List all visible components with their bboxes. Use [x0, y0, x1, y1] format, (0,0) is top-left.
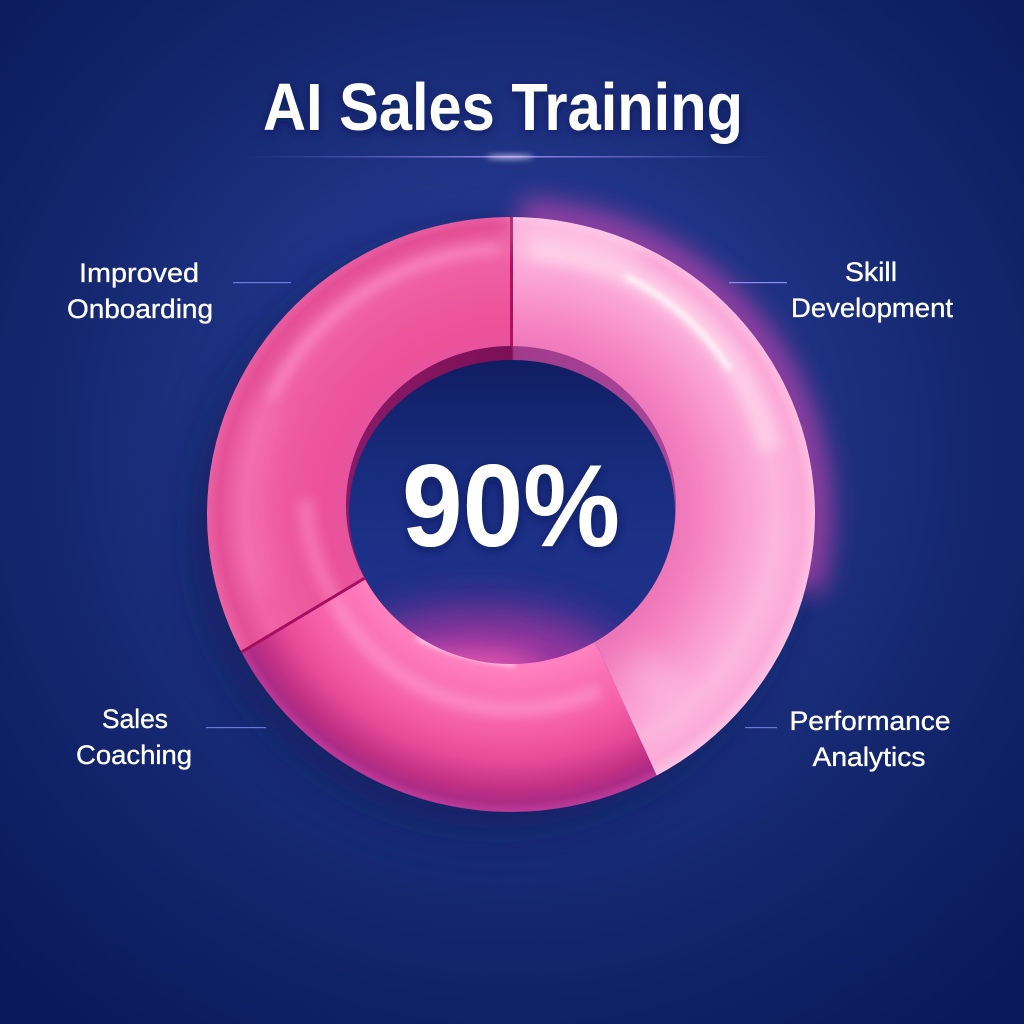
label: Sales Coaching: Coaching — [76, 740, 192, 770]
label: Improved Onboarding — [67, 258, 213, 324]
segment: Improved Onboarding — [207, 217, 510, 653]
label: Skill Development: Development — [791, 293, 954, 323]
label: Sales Coaching: Sales — [102, 704, 168, 734]
label: Performance Analytics: Analytics — [812, 742, 926, 772]
crimson gap at top — [510, 217, 513, 346]
connector: Performance Analytics — [745, 727, 777, 728]
donut chart — [180, 184, 850, 837]
label: Performance Analytics — [790, 706, 950, 772]
ring segments — [207, 217, 815, 812]
label: Performance Analytics: Performance — [790, 706, 950, 736]
title underline glow — [240, 155, 780, 159]
label: Improved Onboarding: Onboarding — [67, 294, 213, 324]
connector: Skill Development — [729, 282, 787, 283]
label: Skill Development: Skill — [845, 257, 897, 287]
label: Sales Coaching — [76, 704, 192, 770]
connector: Sales Coaching — [206, 727, 266, 728]
donut hole — [346, 346, 676, 664]
ring glow — [520, 217, 815, 590]
connector: Improved Onboarding — [233, 282, 291, 283]
ring highlights — [248, 229, 780, 735]
title: AI Sales Training — [263, 70, 743, 145]
label: Skill Development — [791, 257, 954, 323]
segment divider: Improved Onboarding and Sales Coaching — [240, 575, 370, 653]
ring shadow — [191, 232, 801, 828]
segment: Sales Coaching — [242, 579, 657, 812]
label: Improved Onboarding: Improved — [79, 258, 199, 288]
segment: Performance Analytics and Skill Development — [512, 217, 815, 776]
center value: 90% — [402, 440, 620, 571]
